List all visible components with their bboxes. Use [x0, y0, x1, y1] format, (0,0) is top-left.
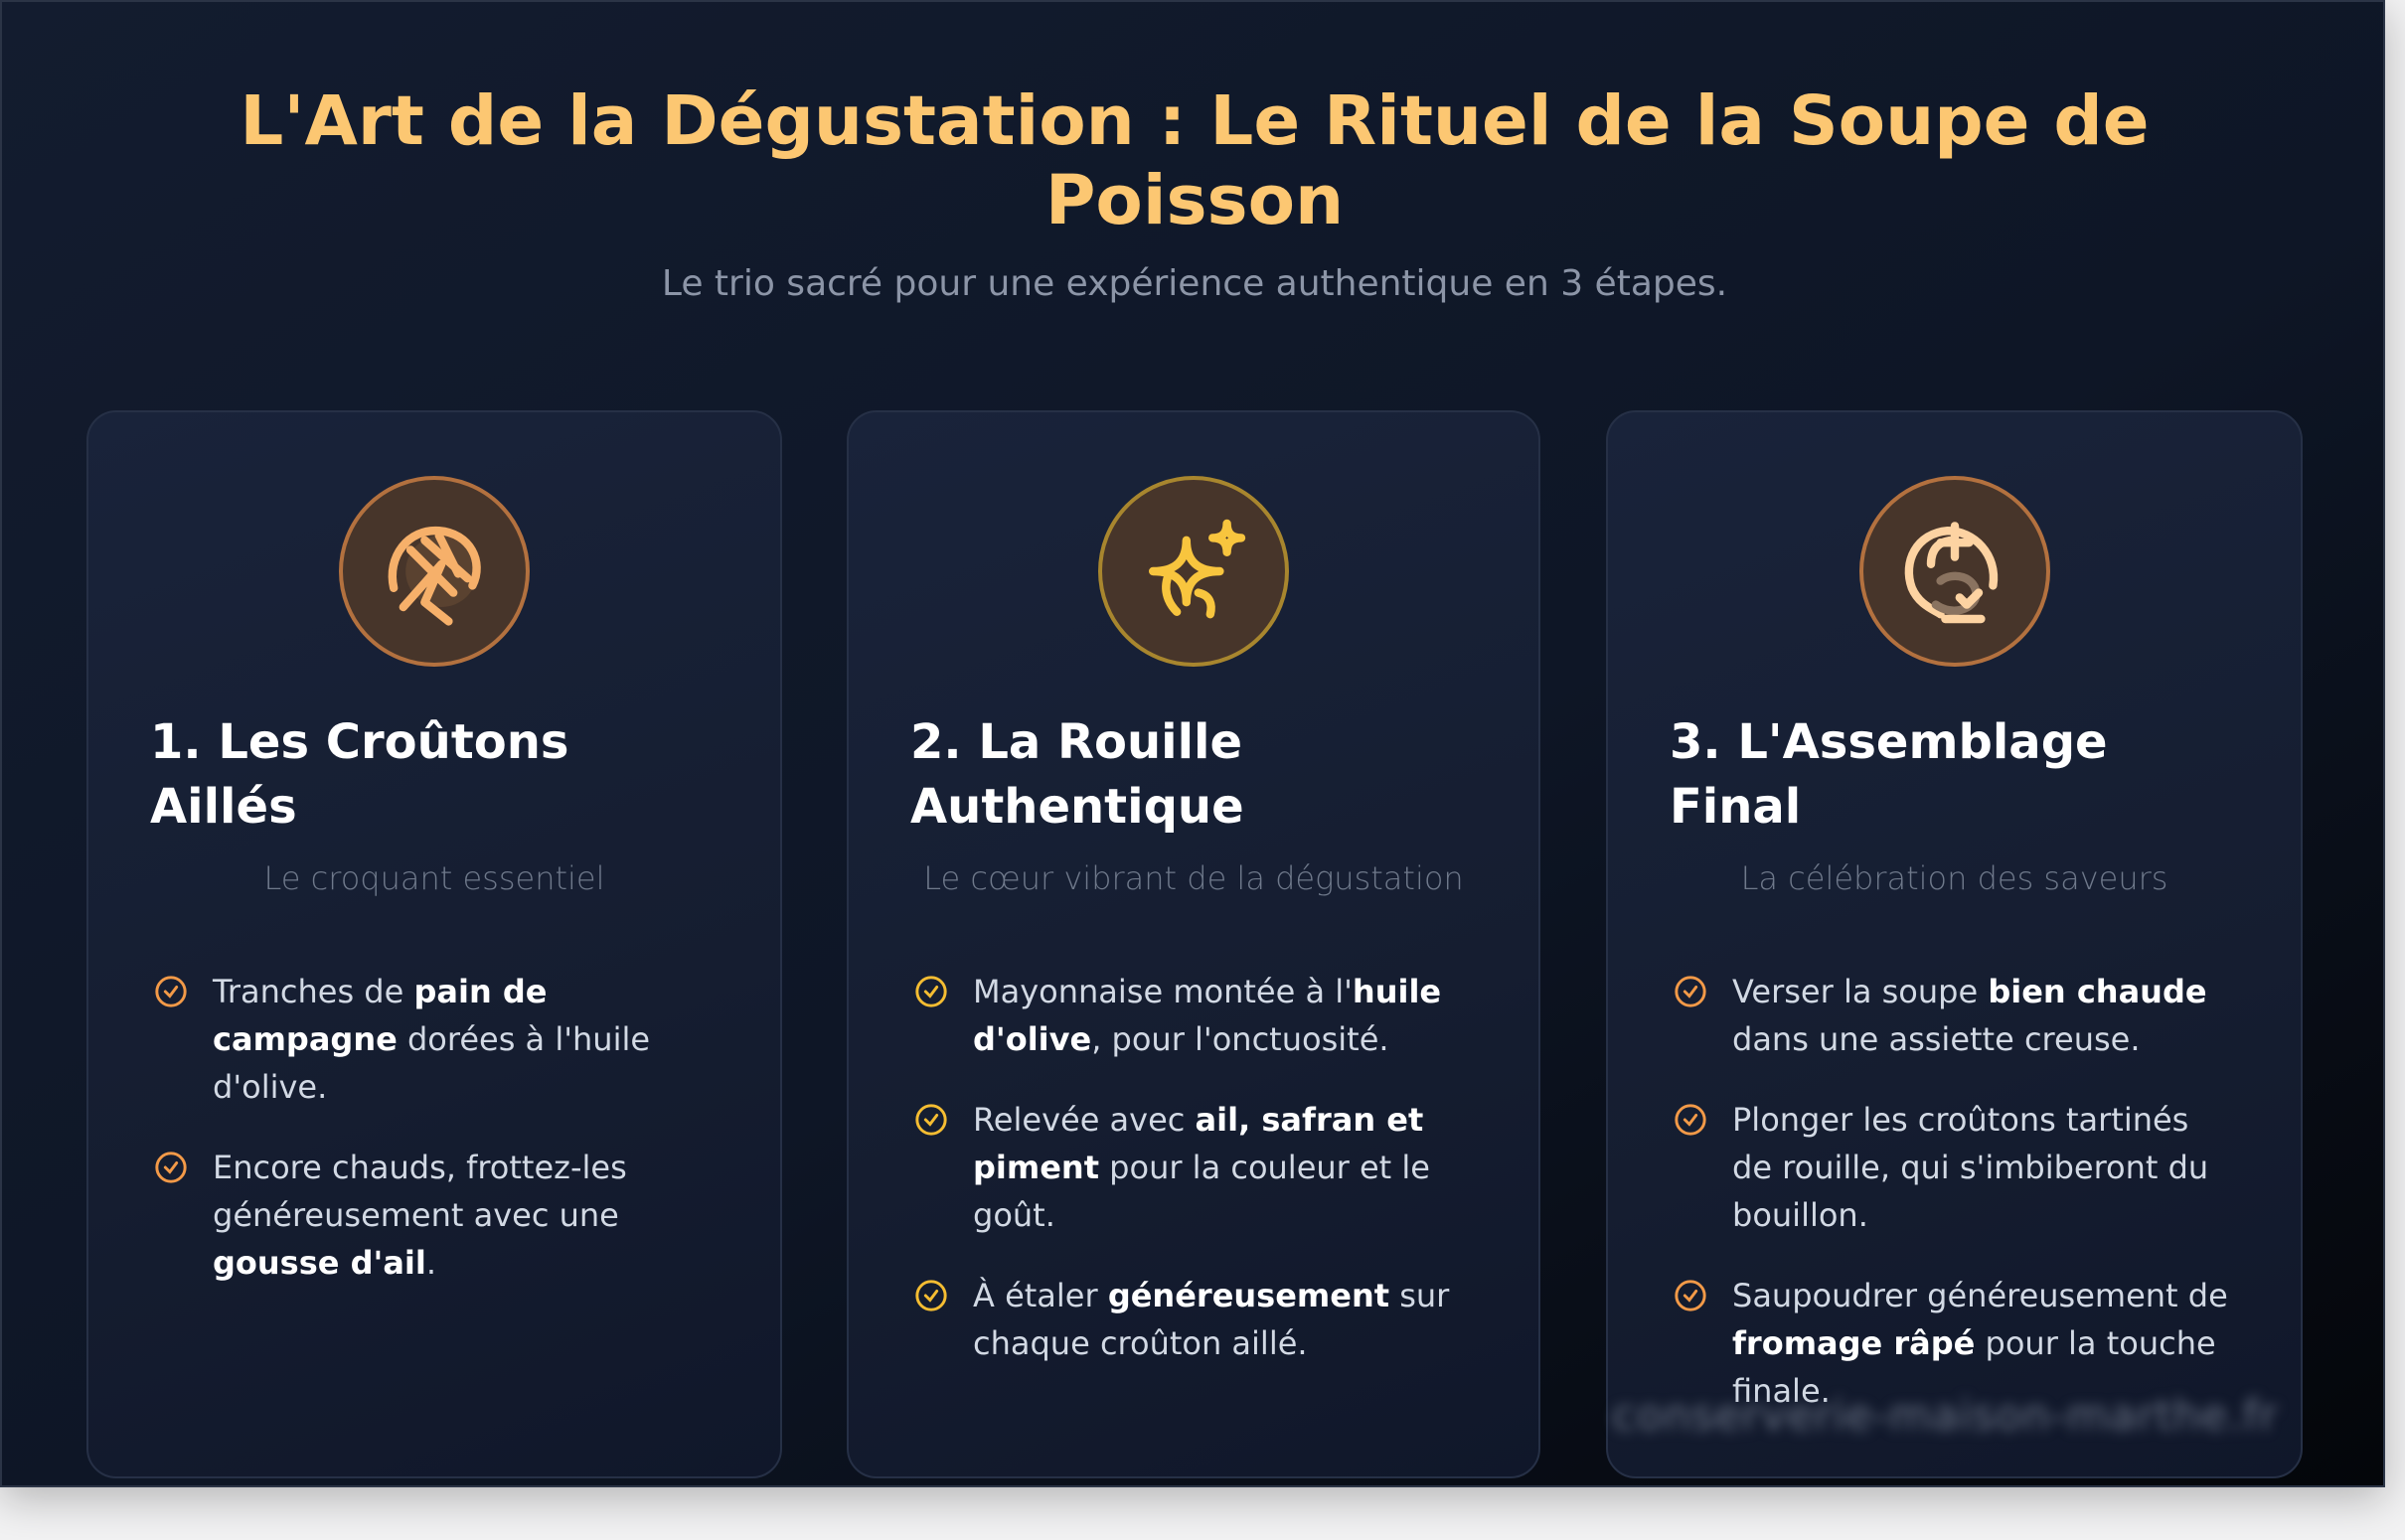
- bullet list: de rouille, qui s'imbiberont du: [1732, 1149, 2208, 1186]
- bullet list: fromage râpé pour la touche: [1732, 1324, 2216, 1362]
- bullet list: gousse d'ail.: [213, 1244, 436, 1282]
- subtitle: Le trio sacré pour une expérience authentique en 3 étapes.: [662, 263, 1727, 304]
- bullet list: [155, 973, 650, 1282]
- bullet list: Verser la soupe bien chaude: [1732, 973, 2207, 1010]
- bullet list: [1675, 973, 2228, 1410]
- bullet list: dans une assiette creuse.: [1732, 1020, 2141, 1058]
- title: Poisson: [1045, 161, 1344, 240]
- bullet list: Relevée avec ail, safran et: [973, 1101, 1423, 1139]
- heading: [1670, 714, 2108, 835]
- heading: 2. La Rouille: [910, 714, 1242, 770]
- panel: assemblage: [1606, 410, 2303, 1478]
- bullet list: Saupoudrer généreusement de: [1732, 1277, 2228, 1314]
- bullet list: Plonger les croûtons tartinés: [1732, 1101, 2188, 1139]
- panel: rouille: [847, 410, 1540, 1478]
- bullet list: [915, 973, 1449, 1362]
- bullet list: campagne dorées à l'huile: [213, 1020, 650, 1058]
- bullet list: goût.: [973, 1196, 1055, 1234]
- bullet list: bouillon.: [1732, 1196, 1868, 1234]
- panel: croutons: [86, 410, 782, 1478]
- title: [240, 81, 2150, 240]
- heading: [150, 714, 568, 835]
- bullet list: À étaler généreusement sur: [973, 1277, 1449, 1314]
- heading: Authentique: [910, 779, 1244, 835]
- heading: Final: [1670, 779, 1801, 835]
- heading: [910, 714, 1244, 835]
- card subtitle: Le croquant essentiel: [264, 859, 604, 897]
- bullet list: d'olive.: [213, 1068, 327, 1106]
- card subtitle: La célébration des saveurs: [1741, 859, 2167, 897]
- heading: 1. Les Croûtons: [150, 714, 568, 770]
- heading: Aillés: [150, 779, 297, 835]
- bullet list: Tranches de pain de: [213, 973, 547, 1010]
- icon: bowl assembly: [1858, 476, 2049, 667]
- bullet list: finale.: [1732, 1372, 1831, 1410]
- heading: 3. L'Assemblage: [1670, 714, 2108, 770]
- watermark: conserverie-maison-marthe.fr: [1612, 1391, 2278, 1441]
- bullet list: d'olive, pour l'onctuosité.: [973, 1020, 1389, 1058]
- icon: croutons: [339, 476, 530, 667]
- icon: sparkles: [1098, 476, 1289, 667]
- title: L'Art de la Dégustation : Le Rituel de la Soupe de: [240, 81, 2150, 161]
- bullet list: chaque croûton aillé.: [973, 1324, 1308, 1362]
- card subtitle: Le cœur vibrant de la dégustation: [923, 859, 1464, 897]
- bullet list: généreusement avec une: [213, 1196, 619, 1234]
- bullet list: Mayonnaise montée à l'huile: [973, 973, 1441, 1010]
- bullet list: piment pour la couleur et le: [973, 1149, 1430, 1186]
- bullet list: Encore chauds, frottez-les: [213, 1149, 627, 1186]
